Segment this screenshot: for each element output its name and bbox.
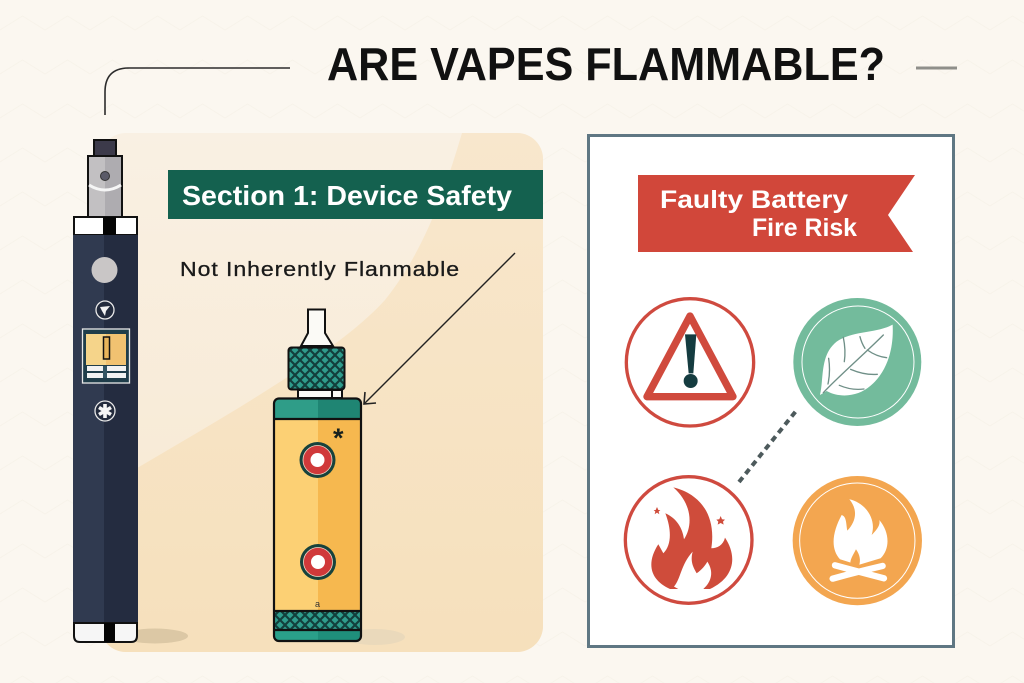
icon: battery unit [274, 310, 361, 641]
connector line to vape [105, 68, 290, 115]
title: ARE VAPES FLAMMABLE? [327, 38, 885, 90]
plus mark: * [333, 423, 344, 453]
battery shadow [345, 629, 405, 645]
top terminal [300, 442, 336, 478]
vape mouthpiece [88, 140, 122, 217]
vape body [73, 235, 138, 623]
panel: device safety [100, 133, 543, 652]
icon: bolt [96, 301, 114, 319]
vape top band [74, 217, 137, 235]
red ribbon [638, 175, 915, 252]
vape button [92, 257, 118, 283]
section heading: Section 1: Device Safety [182, 180, 512, 211]
icon: campfire [793, 476, 922, 605]
icon: vape pen device [73, 140, 138, 642]
icon: warning [626, 299, 754, 426]
bottom terminal [300, 544, 336, 580]
battery body [274, 419, 361, 611]
knurled nut [288, 348, 344, 390]
title dash [916, 66, 957, 70]
icon: gear [95, 401, 115, 421]
icon: leaf [793, 298, 921, 426]
vape bottom band [74, 623, 137, 642]
subheading: Not Inherently Flanmable [180, 259, 460, 281]
battery tip [298, 310, 342, 398]
small label: a [315, 599, 320, 609]
icon: flame [625, 477, 752, 603]
battery outline [274, 398, 361, 641]
battery top cap [274, 398, 361, 419]
section banner [168, 170, 543, 219]
panel: fire risk [588, 136, 954, 646]
vape shadow [122, 628, 188, 644]
ribbon line one: Faulty Battery [660, 186, 848, 214]
knurled base [274, 611, 361, 630]
ribbon line two: Fire Risk [752, 214, 857, 242]
battery foot [274, 630, 361, 641]
dotted connector [739, 411, 796, 482]
arrow to battery [364, 253, 515, 404]
vape screen [82, 329, 130, 383]
